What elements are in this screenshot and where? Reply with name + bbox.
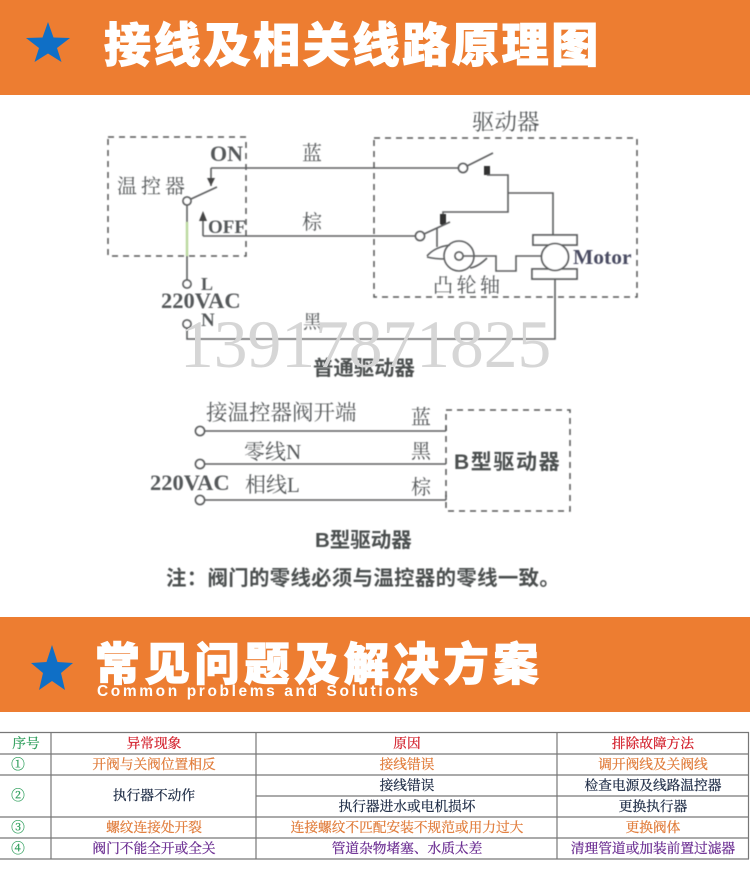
troubleshooting table xyxy=(0,732,749,859)
thermostat box: 温控器 xyxy=(117,175,189,198)
wiring diagram: type B driver xyxy=(150,401,570,590)
wiring diagram: type B driver: 接温控器阀开端 xyxy=(206,401,357,425)
row 2: ② xyxy=(11,788,25,803)
motor xyxy=(532,235,632,279)
wiring diagram: type B driver: 零线N xyxy=(244,440,301,464)
row 2 xyxy=(11,777,722,814)
row 1: 接线错误 xyxy=(380,756,435,772)
row 4: 阀门不能全开或全关 xyxy=(92,840,216,856)
row 1: 调开阀线及关阀线 xyxy=(598,756,708,772)
row 4 xyxy=(11,840,735,856)
wires between thermostat and driver xyxy=(187,142,555,339)
caption: standard driver: 普通驱动器 xyxy=(313,357,416,380)
type B driver box: B型驱动器 xyxy=(454,451,561,474)
row 1: ① xyxy=(11,757,25,772)
row 3: ③ xyxy=(11,820,25,835)
table header row: 异常现象 xyxy=(127,735,182,751)
type B driver box xyxy=(446,410,570,511)
row 3: 更换阀体 xyxy=(626,819,681,835)
wiring diagram: type B driver: 相线L xyxy=(245,473,300,497)
watermark: phone number: 13917871825 xyxy=(180,307,551,382)
thermostat box xyxy=(108,137,246,280)
row 2: 接线错误 xyxy=(380,777,435,793)
table header row xyxy=(12,735,694,751)
row 2: 更换执行器 xyxy=(619,798,688,814)
title: common problems: 常见问题及解决方案 xyxy=(95,639,543,690)
table header row: 序号 xyxy=(12,736,40,751)
icon: blue star xyxy=(26,22,70,62)
power terminals 220VAC xyxy=(161,274,241,331)
row 4: ④ xyxy=(11,841,25,856)
wires between thermostat and driver: 蓝 xyxy=(302,142,322,165)
row 2: 执行器不动作 xyxy=(113,787,195,803)
power terminals 220VAC: 220VAC xyxy=(161,288,241,313)
row 1: 开阀与关阀位置相反 xyxy=(92,756,216,772)
icon: blue star xyxy=(31,645,73,690)
title: wiring diagrams: 接线及相关线路原理图 xyxy=(104,19,601,72)
header band: common problems xyxy=(0,617,750,712)
header band: wiring diagrams xyxy=(0,0,750,95)
thermostat box: ON xyxy=(210,141,243,166)
thermostat box: OFF xyxy=(208,217,246,238)
wiring diagram: standard driver xyxy=(108,110,637,380)
motor: Motor xyxy=(573,245,632,269)
wires between thermostat and driver: 棕 xyxy=(302,211,323,234)
row 1 xyxy=(11,756,708,772)
table grid xyxy=(0,732,749,859)
row 2: 检查电源及线路温控器 xyxy=(585,777,722,793)
row 4: 管道杂物堵塞、水质太差 xyxy=(332,840,483,856)
wiring diagram: type B driver: 黑 xyxy=(411,440,432,463)
driver box xyxy=(374,110,637,297)
row 3: 螺纹连接处开裂 xyxy=(106,819,202,835)
row 2: 执行器进水或电机损坏 xyxy=(339,798,476,814)
driver box: 驱动器 xyxy=(472,110,540,135)
power terminals 220VAC: L xyxy=(201,274,213,294)
subtitle: Common problems and Solutions xyxy=(97,683,418,700)
cam shaft xyxy=(427,241,541,297)
note: 注：阀门的零线必须与温控器的零线一致。 xyxy=(166,567,560,590)
power terminals 220VAC: N xyxy=(201,310,215,331)
table header row: 原因 xyxy=(393,736,421,751)
wiring diagram: type B driver: 棕 xyxy=(411,476,432,499)
caption: type B driver: B型驱动器 xyxy=(315,529,412,552)
row 4: 清理管道或加装前置过滤器 xyxy=(571,840,735,856)
wires between thermostat and driver: 黑 xyxy=(303,311,323,333)
wiring diagram: type B driver: 220VAC xyxy=(150,470,230,495)
table header row: 排除故障方法 xyxy=(612,735,694,751)
row 3 xyxy=(11,819,681,835)
cam shaft: 凸轮轴 xyxy=(433,274,504,297)
row 3: 连接螺纹不匹配安装不规范或用力过大 xyxy=(291,819,524,835)
wiring diagram: type B driver: 蓝 xyxy=(411,406,431,429)
